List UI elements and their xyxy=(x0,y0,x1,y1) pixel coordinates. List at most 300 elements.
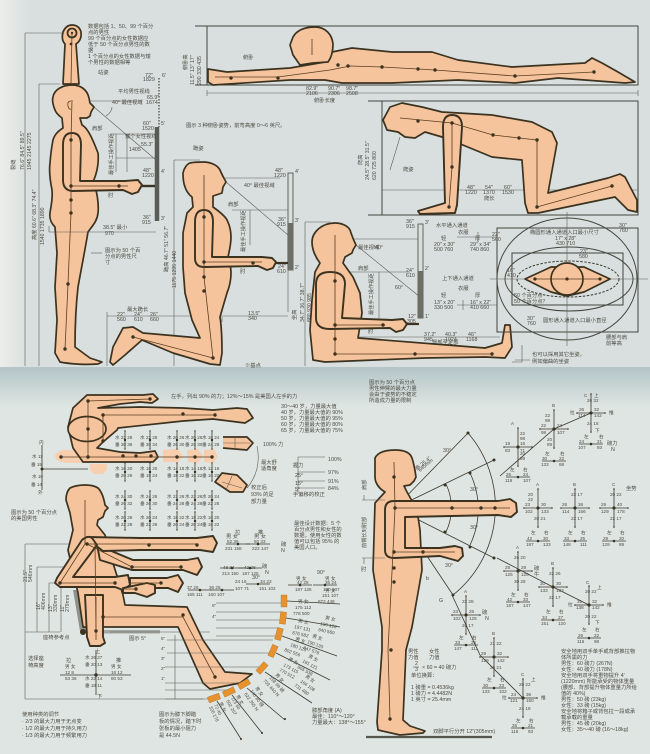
pedal force rays and values: 502 267 xyxy=(225,699,238,716)
force grid: lower ray C xyxy=(568,580,612,644)
text: force formula and units: 1 磅力 = 4.4482N xyxy=(411,689,452,697)
crawling frame and dimensions: 1370 xyxy=(483,190,495,196)
seated dimensions: 肩部 xyxy=(358,264,369,272)
force readouts by hand: 磅 xyxy=(262,562,267,570)
force grid: upper ray C: 93 xyxy=(597,445,603,450)
force grid columns: 垂 26 30 xyxy=(140,500,158,506)
pedal force rays and values: 770 512 xyxy=(279,667,296,680)
fan of angle rays and arcs: 30° xyxy=(445,563,453,569)
passage labels: 轻 xyxy=(441,234,447,242)
crawling frame and dimensions: 620 725 800 xyxy=(372,151,378,180)
crawling frame and dimensions: 爬高 xyxy=(356,155,364,165)
force grid: middle A: 右 xyxy=(544,529,549,536)
force grid: lowest ray C: 左 xyxy=(516,717,521,723)
crawling frame and dimensions: 爬姿 xyxy=(403,165,414,173)
passage labels: 29" x 34" xyxy=(470,242,491,248)
force grid: upper ray B: B xyxy=(552,403,555,408)
text: safety load note: (1220mm) 所能承受的物体重量 xyxy=(561,677,635,685)
seated dimensions: 1168 xyxy=(466,337,477,343)
pedal force rays and values: 805 538 xyxy=(297,664,314,677)
text: use of strength xyxy=(22,710,87,739)
force grid: lowest ray C: 拉 xyxy=(502,694,507,701)
pedal force rays and values: 731 480 xyxy=(293,683,310,697)
force grid: upper ray B: 30 xyxy=(542,456,548,461)
kneeling control board: 4' xyxy=(295,169,299,175)
pedal force rays and values: 113 60 xyxy=(230,696,242,711)
fan of angle rays and arcs: 手高 25.4" xyxy=(409,454,433,476)
force grid: upper ray A: 左 xyxy=(510,466,515,472)
force grid: lowest ray A: 102 xyxy=(453,616,461,621)
force readouts by hand: 37 25 xyxy=(187,585,199,590)
control board with sight lines: 肘 xyxy=(108,191,114,199)
force grid: lowest ray B xyxy=(479,631,509,694)
force grid: lowest ray C: 24 18 xyxy=(519,706,531,711)
figure: seated skeleton xyxy=(333,235,494,356)
force grid: upper ray C: 磅力 xyxy=(607,439,618,447)
passage text: 410 xyxy=(507,273,516,279)
force readouts by hand: 231 158 xyxy=(225,546,242,551)
force grid: upper ray B: 133 xyxy=(541,462,549,467)
seat and backrest xyxy=(73,590,160,635)
chart: wrist deviation correction xyxy=(293,457,342,498)
seated dimensions: 臀部至足部 xyxy=(432,338,459,346)
crawling frame and dimensions xyxy=(356,101,638,215)
control board with sight lines: 矮个女性视线 xyxy=(125,132,157,140)
fan of angle rays and arcs xyxy=(395,413,591,698)
force grid: middle B: 111 xyxy=(580,542,587,547)
figure: top-view hands xyxy=(59,397,253,492)
passage text: 50 个百分点 xyxy=(514,291,543,299)
background: upper panel xyxy=(0,0,650,367)
passage text: 580 xyxy=(579,254,588,260)
control board with sight lines: 最佳手工操作视距 xyxy=(107,133,115,175)
force grid columns: 水 18 24 xyxy=(202,434,220,440)
force grid columns: 垂 22 28 xyxy=(115,521,133,527)
kneeling dimensions: 13.5" xyxy=(248,311,260,317)
force readouts by hand: 160 107 xyxy=(208,592,225,597)
force grid: lowest ray A: A xyxy=(464,589,468,594)
force readouts by hand: 165 111 xyxy=(187,592,203,597)
force grid: lower hand: 男 女 xyxy=(111,663,122,670)
text: safety load note: 女性：40 磅力 (178N) xyxy=(561,665,613,673)
force grid: upper ray A: 右 xyxy=(523,466,528,473)
force grid: middle C xyxy=(599,482,637,547)
kneeling control board: 40° 最佳视域 xyxy=(244,181,275,189)
force grid columns: 垂 22 26 xyxy=(140,521,158,527)
figure: crawling skeleton xyxy=(400,118,614,209)
dimension lines: 图示为 50 个百分点 xyxy=(11,508,58,516)
force grid columns: 垂 20 24 xyxy=(185,521,203,527)
force grid columns: 垂 26 30 xyxy=(167,441,185,447)
force readouts by hand: 推 xyxy=(258,528,264,536)
dimension lines: standing height: 裂缝 xyxy=(9,160,17,170)
crawling frame and dimensions: 1220 xyxy=(465,190,477,196)
force grid columns: 垂 30 34 xyxy=(140,441,158,447)
force grid: upper ray C: C xyxy=(584,393,588,398)
force grid: upper ray B: 89 xyxy=(547,442,553,447)
force grid: lowest ray A: 右 xyxy=(472,634,477,641)
force grid: lower hand: 垂 18 11 xyxy=(85,682,102,688)
force grid: lowest ray A xyxy=(451,589,489,651)
text: pedal note: 是 44.5N xyxy=(159,732,180,739)
passage text: 前等高 xyxy=(606,339,622,347)
force readouts by hand: 36 25 xyxy=(209,585,221,590)
force grid columns: 水 22 26 xyxy=(167,493,185,499)
dimension lines: 279mm xyxy=(65,595,71,612)
seated board: 24" xyxy=(406,268,414,274)
figure: standing skeleton xyxy=(63,100,128,351)
force grid columns: 水 14 18 xyxy=(185,465,203,471)
force grid: lower ray C: 20 22 xyxy=(585,589,597,594)
seated board: 305 xyxy=(407,319,416,325)
passage text: 760 xyxy=(619,228,628,234)
force grid: lower hand: 水 26 27 xyxy=(85,654,103,660)
knee angle rays: 5" xyxy=(161,636,166,641)
force grid: middle B: 156 xyxy=(578,509,586,514)
figure: prone body xyxy=(208,48,635,85)
text: top note xyxy=(369,378,417,404)
pedal force rays and values: 876 582 xyxy=(292,630,310,639)
force grid: lower ray A: 28 xyxy=(505,565,511,570)
force grid: upper ray B: 24 xyxy=(557,423,563,428)
force grid: middle C: 坐势 xyxy=(626,484,637,492)
figure: crawling arm xyxy=(418,115,462,214)
force grid: lowest ray C: 93 xyxy=(528,729,534,734)
text: safety load note xyxy=(561,647,638,733)
chart: wrist deviation correction: 15° xyxy=(295,481,303,487)
pedal force rays and values: 男 女 xyxy=(298,617,310,626)
pedal force rays and values: 164 108 xyxy=(299,679,316,693)
force grid columns: 水 22 28 xyxy=(140,434,158,440)
figure: kneeling body xyxy=(110,162,231,365)
pedal force rays and values xyxy=(208,587,340,740)
force grid: lower ray B: 30 xyxy=(556,581,562,586)
prone frame and dimensions: 俯卧长度 xyxy=(314,96,336,104)
text: use of strength: · 1/2 的最大力用于持久用力 xyxy=(22,724,87,732)
panel: passage entry diagram xyxy=(434,212,648,347)
force grid: upper ray C: 拉 xyxy=(570,409,575,416)
shoulder and waist dimension: 前臂长到肘部 xyxy=(360,517,368,548)
force grid: lower hand: 水 22 14 xyxy=(85,675,103,681)
force grid: middle B xyxy=(560,482,590,547)
dimension lines: 11" xyxy=(60,605,66,612)
passage text: 50 个百分点？ xyxy=(514,297,548,305)
text: hand force notes: 40 岁，力量最大值的 90% xyxy=(281,408,343,416)
force grid: middle B: 25 xyxy=(580,536,586,541)
passage labels: 740 860 xyxy=(470,247,489,253)
passage labels: 厚 xyxy=(475,292,481,299)
figure: kneeling arm xyxy=(195,210,276,270)
dimension lines: 13" xyxy=(48,604,54,612)
force grid: lower ray B xyxy=(538,561,568,626)
force grid: middle A: 187 xyxy=(526,542,534,547)
kneeling control board: 2' xyxy=(295,265,299,271)
force grid columns: 水 16 20 xyxy=(140,465,158,471)
force grid: middle A: 20 xyxy=(528,492,534,497)
force readouts by hand: N xyxy=(281,548,285,554)
force grid: middle C: 29 xyxy=(603,536,609,541)
floor and stance xyxy=(366,727,495,737)
text: pedal note: 板的情况，踏下时 xyxy=(159,717,202,725)
kneeling dimensions: 610 xyxy=(134,317,143,323)
pedal force rays and values: 872 448 xyxy=(318,599,335,604)
text: use of strength: · 2/3 的最大力用于无点变 xyxy=(22,717,82,725)
text: safety load note: 男性：45 磅 (20kg) xyxy=(561,719,606,727)
force readouts by hand: 男 女 xyxy=(254,532,266,540)
force grid: lower ray A: 28 xyxy=(521,565,527,570)
knee angle rays: 4" xyxy=(212,614,217,619)
seated dimensions: 1024 xyxy=(445,337,457,343)
figure: kneeling skeleton xyxy=(131,175,262,360)
text: use of strength: · 1/3 的最大力用于频繁用力 xyxy=(22,731,87,739)
seated dimensions: 945 xyxy=(424,337,433,343)
force readouts by hand xyxy=(187,528,340,597)
force grid: lower ray A: 187 xyxy=(506,603,514,608)
kneeling control board xyxy=(224,168,299,275)
force grid: upper ray C: 142 xyxy=(594,413,602,418)
pedal force rays and values: 男 女 xyxy=(298,598,309,605)
force grid: lowest ray C: 36 xyxy=(526,692,532,697)
text: force formula and units: 2 xyxy=(415,661,418,667)
pedal force rays and values: 男 女 xyxy=(294,635,307,646)
text: pedal note: 图示为膝下脚踏 xyxy=(159,710,197,718)
control board with sight lines: 1405 xyxy=(129,147,141,153)
force grid columns: 水 14 18 xyxy=(167,465,185,471)
passage labels: 13" x 20" xyxy=(434,300,455,306)
pedal force rays and values: 男 女 xyxy=(307,653,320,664)
pedal force rays and values: 72 40 xyxy=(213,703,223,716)
figure: top-view body and arms xyxy=(68,394,253,462)
force grid: upper ray C: 左 xyxy=(584,433,589,439)
pedal force rays and values: 173 115 xyxy=(283,662,300,675)
force grid: lowest ray B: 26 21 xyxy=(490,665,502,670)
passage labels: 厚 xyxy=(475,235,481,242)
force grid: middle C: 29 xyxy=(601,502,607,507)
force grid: upper ray A: 20 xyxy=(520,451,526,456)
fan of angle rays and arcs: 30° xyxy=(470,525,478,531)
force grid: lower hand: 12 8 xyxy=(65,670,74,675)
force grid: lower ray B: B xyxy=(551,561,554,566)
force readouts by hand: 36 24 xyxy=(325,580,337,585)
force grid: upper ray A: 22 xyxy=(520,431,526,436)
force readouts by hand: 男 女 xyxy=(296,575,307,582)
force grid: lower ray B: 右 xyxy=(559,608,564,615)
force grid: lower hand: 80 53 xyxy=(111,676,123,681)
kneeling dimensions: 24" xyxy=(134,312,142,318)
force grid: left wrist: 水 11 xyxy=(32,453,43,459)
fan of angle rays and arcs: b xyxy=(426,576,429,582)
figure: bent arm xyxy=(55,537,130,590)
pedal force rays and values: 197 131 xyxy=(294,624,312,633)
control board with sight lines: 36" xyxy=(143,215,151,221)
force grid: middle B: 26 xyxy=(562,502,568,507)
force grid: lowest ray B: 右 xyxy=(500,676,505,683)
force grid: lowest ray C: 121 xyxy=(510,698,518,703)
text: top note: 会由于姿势的不稳定 xyxy=(369,390,417,398)
force grid: lowest ray A: 20 17 xyxy=(462,623,474,628)
text: design note: 美国人口。 xyxy=(294,543,320,551)
force readouts by hand: 187 125 xyxy=(242,571,259,576)
force grid: lowest ray B: 102 xyxy=(499,689,507,694)
force grid: upper ray B: 22 xyxy=(559,456,565,461)
force grid: lower ray A: 125 xyxy=(505,572,513,577)
force grid: lowest ray C xyxy=(502,672,546,734)
force grid: lower hand: 53 36 xyxy=(65,676,77,681)
seated dimensions: 37.2" xyxy=(424,332,436,338)
text: hand force notes: 50 岁，力量最大值的 95% xyxy=(281,414,343,422)
figure: seated body xyxy=(310,223,512,362)
pedal force rays and values: 320 178 xyxy=(208,705,220,723)
force grid: lower ray A: 30 28 xyxy=(514,579,526,584)
force grid: middle B: 33 xyxy=(564,536,570,541)
force grid columns: 水 24 28 xyxy=(140,493,158,499)
force grid: lowest ray C: 上 xyxy=(531,676,536,682)
force grid: lower ray A: 26 20 xyxy=(514,555,526,560)
force readouts by hand: 90° xyxy=(317,570,325,576)
figure: standing body xyxy=(50,85,102,364)
force readouts by hand: 42 28 xyxy=(297,580,309,585)
force grid columns: 水 12 16 xyxy=(202,465,220,471)
text: data note: 据 xyxy=(88,46,94,54)
prone frame and dimensions: 2508 xyxy=(346,91,358,97)
force grid: middle C: 20 22 xyxy=(610,492,622,497)
text: safety load note: 体所需的力 xyxy=(561,653,588,661)
force grid: upper ray C: 107 xyxy=(578,445,586,450)
control board with sight lines: 60" xyxy=(143,121,151,127)
panel: prone man xyxy=(181,26,638,129)
force grid: lowest ray C: 推 xyxy=(541,694,546,701)
passage text: 腰部与肩 xyxy=(606,333,627,341)
force grid columns: 垂 26 30 xyxy=(185,441,203,447)
force grid: upper ray A: 83 xyxy=(505,448,511,453)
orange pedal bars on arc xyxy=(207,595,287,703)
chart: wrist deviation correction: 100% xyxy=(328,457,342,463)
background: lower panel xyxy=(0,367,650,754)
force grid: middle A: 30 xyxy=(541,502,547,507)
seated dimensions: 例如偏曲的坐姿 xyxy=(532,357,570,365)
force grid: lowest ray B: 29 xyxy=(481,651,487,656)
force grid: lower ray B: 133 xyxy=(540,588,548,593)
top-view pale lower arm and hands xyxy=(55,449,218,474)
force grid: lower ray A: 125 xyxy=(521,572,529,577)
force grid: lowest ray B: 23 xyxy=(499,683,505,688)
figure: third arm xyxy=(97,545,202,575)
pedal force rays and values: 175 112 xyxy=(295,605,312,610)
pedal force rays and values: 158 99 磅 xyxy=(268,675,286,694)
text: figure note: 寸 xyxy=(105,258,111,266)
dimension lines: standing height: 1945 2145 2275 xyxy=(27,132,33,170)
force grid: middle B: 22 17 xyxy=(571,516,583,521)
dimension lines: 的美国男性 xyxy=(11,514,38,522)
text: force formula and units xyxy=(408,647,456,703)
force grid: lower ray A: 左 xyxy=(511,591,516,597)
force grid: lower ray A: A xyxy=(516,545,520,550)
figure: fourth forearm xyxy=(123,583,155,597)
force grid: lower ray C: 拉 xyxy=(568,601,573,608)
figure: seated torso and head xyxy=(66,485,252,689)
force grid: lower ray C: 20 22 xyxy=(585,614,597,619)
figure: hanging arm xyxy=(85,595,105,646)
force grid: upper ray A: 24 xyxy=(523,472,529,477)
text: knee angle: 膝部角度 (A) xyxy=(312,706,342,714)
text: design note: 值可以包括 95% 的 xyxy=(294,537,339,545)
panel: seated man xyxy=(290,219,585,366)
passage text: 17" x 28" xyxy=(555,236,576,242)
pedal force rays and values: 151 107 xyxy=(322,593,339,598)
force grid: middle B: B xyxy=(573,482,576,487)
force grid: lower ray C: 下 xyxy=(595,620,600,626)
force grid: lower ray A: 右 xyxy=(524,591,529,598)
figure: arm reaching 90 degrees xyxy=(87,536,217,552)
force grid columns: 垂 16 20 xyxy=(202,472,220,478)
force grid: upper ray B: 98 xyxy=(559,462,565,467)
force grid: middle C: 20 xyxy=(619,536,625,541)
force grid: lowest ray A: 147 xyxy=(454,646,462,651)
text: safety load note: 男性：60 磅力 (267N) xyxy=(561,659,613,667)
force grid: lower ray B: 133 xyxy=(556,588,564,593)
force grid: middle B: 右 xyxy=(581,529,586,536)
force grid: middle A: 102 xyxy=(525,509,533,514)
text: pedal note xyxy=(159,710,202,739)
passage labels: 410 660 xyxy=(470,305,489,311)
chart: wrist deviation correction: 手偏移的校正 xyxy=(293,490,325,498)
passage text: 23" xyxy=(580,249,588,255)
prone frame and dimensions: 90.7" xyxy=(328,86,340,92)
passage text: 30" xyxy=(527,316,535,322)
force readouts by hand: 磅 xyxy=(281,540,286,548)
force grid: lowest ray A: 磅 xyxy=(482,608,487,616)
pedal force rays and values: 802 556 xyxy=(284,647,301,658)
force grid: lowest ray C: 26 xyxy=(512,723,518,728)
kneeling dimensions: ※基点 xyxy=(245,361,262,369)
force grid: upper ray A: 89 xyxy=(520,456,526,461)
passage labels: 330 500 xyxy=(434,305,453,311)
force grid: lower hand: 男 女 xyxy=(65,663,76,670)
force grid: middle A: 30 xyxy=(543,536,549,541)
force grid: middle B: 22 17 xyxy=(571,492,583,497)
kneeling control board: 肘 xyxy=(240,267,246,275)
force grid: lowest ray A: 111 xyxy=(471,646,478,651)
dimension lines: 选择座 xyxy=(28,654,45,662)
text: safety load note: 安全地用双手将重物提升 4' xyxy=(561,671,625,679)
pedal force rays and values: 男 女 xyxy=(325,614,337,623)
crawling frame and dimensions: 1530 xyxy=(502,190,514,196)
force grid: middle A: 左 xyxy=(531,529,536,535)
force grid: middle C: 左 xyxy=(607,529,612,535)
kneeling dimensions: 660 xyxy=(150,317,159,323)
force grid: lower hand xyxy=(60,647,131,700)
pedal force rays and values: 622 355 N xyxy=(243,692,259,712)
passage labels: 衣服 xyxy=(458,228,469,236)
kneeling dimensions xyxy=(107,144,288,369)
force grid: lower ray B: 27 xyxy=(558,615,564,620)
pedal force rays and values: 男 女 xyxy=(274,672,286,684)
pedal force rays and values: 778 500 xyxy=(293,611,310,616)
pedal force rays and values: 男 女 xyxy=(325,587,336,594)
pedal force rays and values: 男 女 xyxy=(217,701,228,714)
figure: prone skeleton xyxy=(215,39,596,80)
force grid: upper ray A: 107 xyxy=(523,478,531,483)
force grid: upper ray B: 20 xyxy=(547,437,553,442)
force grid: lowest ray C: 20 22 xyxy=(519,682,531,687)
seated dimensions: 880 930 985 xyxy=(307,293,313,322)
force grid columns: 垂 18 22 xyxy=(202,521,220,527)
force grid: lower ray A: 牛 xyxy=(534,570,540,578)
force grid columns: 垂 24 28 xyxy=(185,500,203,506)
crawling frame and dimensions: 爬长 xyxy=(484,194,495,202)
control board with sight lines: 55.3" xyxy=(141,142,153,148)
chart: wrist deviation correction: 97% xyxy=(328,470,339,476)
